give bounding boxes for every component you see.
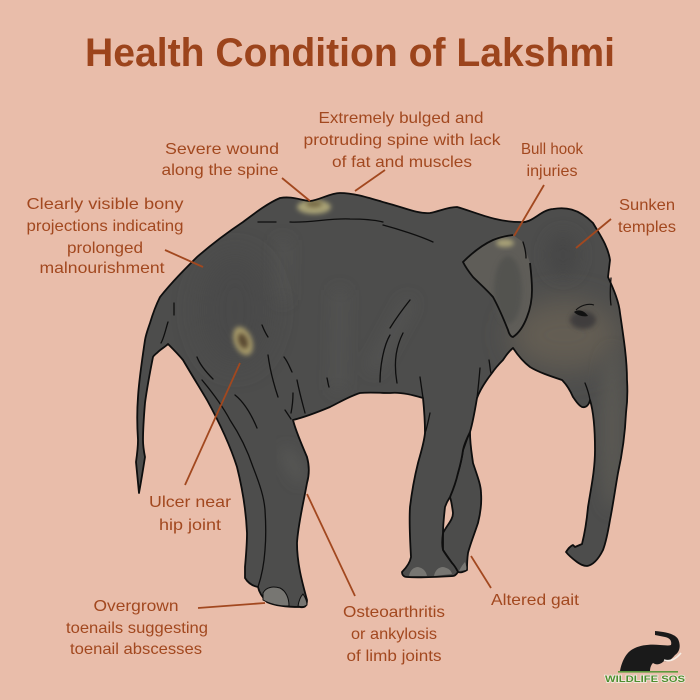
skin wrinkle lines: [161, 219, 611, 587]
callout: overgrown toenails: [66, 598, 265, 658]
callout: bony projections: prolonged: [67, 240, 143, 257]
body outline: [136, 193, 627, 607]
callout: bulged spine: of fat and muscles: [332, 154, 472, 171]
eye socket shadow: [570, 311, 596, 329]
callout: bulged spine: [304, 110, 502, 191]
elephant body silhouette: [136, 193, 627, 607]
rib highlights: [282, 240, 410, 390]
callout: sunken temples: Sunken: [619, 197, 675, 214]
callout: osteoarthritis: [307, 494, 445, 665]
callout: bull hook injuries: Bull hook: [521, 141, 584, 158]
callout: overgrown toenails: toenail abscesses: [70, 641, 202, 658]
callout: osteoarthritis: of limb joints: [346, 648, 442, 665]
callout: bulged spine: protruding spine with lack: [304, 132, 502, 149]
head warm tone: [510, 300, 620, 370]
logo green bar: [618, 671, 678, 673]
logo tusk: [664, 653, 681, 661]
callout: bony projections: Clearly visible bony: [26, 196, 184, 213]
callout: overgrown toenails: Overgrown: [94, 598, 178, 615]
callout: altered gait: [471, 556, 580, 609]
eye: [574, 304, 594, 316]
callout: bony projections: malnourishment: [40, 260, 165, 277]
logo elephant: [620, 631, 680, 671]
callout: bull hook injuries: [514, 141, 584, 236]
callout: altered gait: Altered gait: [491, 592, 580, 609]
callout: severe wound: [162, 141, 310, 201]
callout: sunken temples: [576, 197, 676, 248]
callout: osteoarthritis: or ankylosis: [351, 626, 437, 643]
logo wordmark: WILDLIFE SOS: [605, 674, 685, 685]
logo: Wildlife SOS: [605, 631, 685, 685]
callout: bony projections: [26, 196, 203, 277]
far front leg: [443, 432, 481, 572]
spine wound: [297, 200, 331, 214]
ear: [463, 235, 532, 337]
hip shadow: [201, 255, 269, 365]
hind leg highlight: [285, 450, 302, 480]
callout: severe wound: Severe wound: [165, 141, 279, 158]
callout: bulged spine: Extremely bulged and: [318, 110, 484, 127]
trunk tone: [602, 374, 622, 492]
callout: severe wound: along the spine: [162, 162, 279, 179]
callout: sunken temples: temples: [618, 219, 676, 236]
hind foot toenails: [263, 587, 307, 607]
callout: hip ulcer: Ulcer near: [149, 494, 232, 511]
callout: overgrown toenails: toenails suggesting: [66, 620, 208, 637]
elephant illustration: [136, 193, 627, 607]
body shading and skin tones: [294, 198, 622, 492]
hip ulcer: [229, 324, 257, 358]
callout: hip ulcer: hip joint: [159, 517, 222, 534]
sunken temple shadow: [547, 233, 579, 277]
title: Health Condition of Lakshmi: [85, 31, 615, 75]
callout: osteoarthritis: Osteoarthritis: [343, 604, 445, 621]
callout: hip ulcer: [149, 363, 240, 534]
front foot toenails: [409, 562, 466, 576]
callout: bony projections: projections indicating: [26, 218, 184, 235]
callout: bull hook injuries: injuries: [526, 163, 578, 180]
